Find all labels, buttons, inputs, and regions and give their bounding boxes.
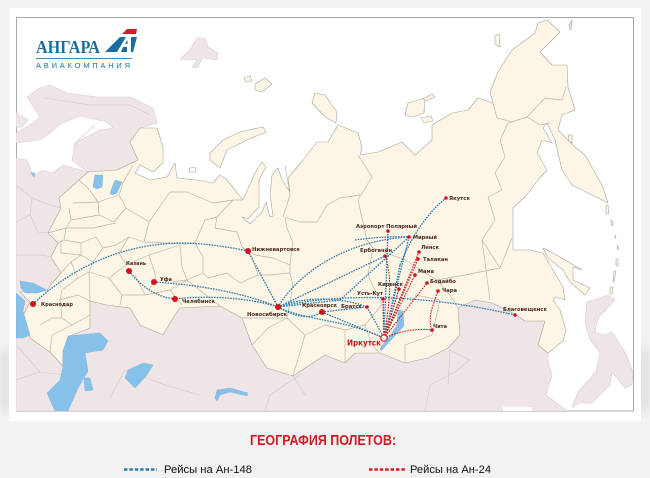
logo wordmark: АНГАРА — [36, 37, 100, 57]
city labels: Чара — [442, 288, 457, 294]
islands — [189, 20, 619, 295]
city labels: Челябинск — [182, 298, 215, 305]
legend: An-24 — [369, 464, 491, 476]
Russia — [20, 20, 608, 376]
city labels: Краснодар — [41, 302, 73, 308]
region borders — [40, 87, 566, 376]
neighbouring countries — [16, 38, 633, 411]
city labels: Красноярск — [302, 303, 337, 309]
city labels: Новосибирск — [247, 311, 287, 318]
city labels: Талакан — [423, 257, 448, 263]
logo tail mark — [105, 29, 137, 52]
legend: An-24: Рейсы на Ан-24 — [410, 464, 491, 476]
city labels — [41, 196, 547, 348]
city labels: Киренск — [378, 282, 403, 288]
city labels: Благовещенск — [503, 307, 547, 313]
hub marker: Irkutsk — [381, 335, 387, 341]
city labels: Усть-Кут — [357, 291, 384, 297]
city labels: Бодайбо — [430, 278, 456, 285]
map: geography — [16, 20, 633, 411]
city labels: Мирный — [413, 234, 437, 241]
city labels: Чита — [433, 324, 447, 330]
city labels: Иркутск — [347, 338, 381, 348]
logo subtitle: АВИАКОМПАНИЯ — [36, 61, 130, 70]
lakes and seas — [16, 173, 404, 411]
legend: An-148 — [124, 464, 252, 476]
city labels: Казань — [126, 261, 146, 267]
city markers — [30, 196, 517, 332]
city labels: Нижневартовск — [252, 247, 300, 253]
routes: An-24 red — [383, 252, 438, 338]
city labels: Якутск — [449, 196, 470, 202]
city labels: Мама — [418, 269, 434, 275]
city labels: Ербогачён — [360, 247, 392, 254]
legend: An-148: Рейсы на Ан-148 — [164, 464, 252, 476]
logo: Ангара airline — [36, 29, 137, 70]
city labels: Аэропорт Полярный — [356, 223, 417, 230]
routes: An-148 blue — [33, 198, 515, 338]
title: ГЕОГРАФИЯ ПОЛЕТОВ: — [250, 433, 396, 449]
city labels: Уфа — [160, 276, 172, 283]
city labels: Ленск — [421, 245, 439, 251]
city labels: Братск — [341, 304, 362, 310]
